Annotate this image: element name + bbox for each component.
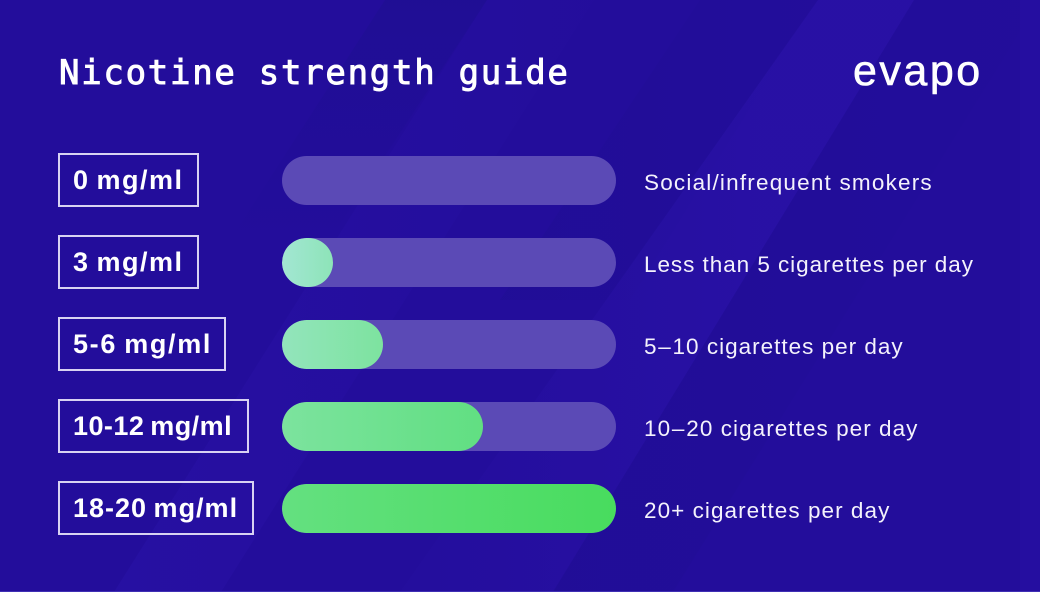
row: 3 mg/ml	[58, 235, 974, 289]
description: Social/infrequent smokers	[644, 170, 933, 195]
label: 5-6 mg/ml: 5-6 mg/ml	[73, 329, 212, 359]
bar: 30 percent fill	[282, 320, 616, 369]
label: 18-20 mg/ml: 18-20 mg/ml	[73, 493, 238, 523]
row: 5-6 mg/ml	[58, 317, 904, 371]
label: 18-20 mg/ml	[58, 481, 254, 535]
row: 10-12 mg/ml	[58, 399, 918, 453]
label: 10-12 mg/ml: 10-12 mg/ml	[73, 411, 232, 441]
label: 5-6 mg/ml	[58, 317, 226, 371]
bar: full	[282, 484, 616, 533]
bar: empty	[282, 156, 616, 205]
description: 20+ cigarettes per day	[644, 498, 890, 523]
label: 0 mg/ml	[58, 153, 199, 207]
logo: evapo: evapo	[853, 47, 983, 95]
label: 3 mg/ml	[58, 235, 199, 289]
description: Less than 5 cigarettes per day	[644, 252, 974, 277]
label: 10-12 mg/ml	[58, 399, 249, 453]
bar: 15 percent fill	[282, 238, 616, 287]
label: 0 mg/ml: 0 mg/ml	[73, 165, 184, 195]
description: 5 – 10 cigarettes per day	[644, 334, 904, 359]
bar: 60 percent fill	[282, 402, 616, 451]
row: 0 mg/ml	[58, 153, 933, 207]
title: Nicotine strength guide	[59, 53, 570, 93]
row: 18-20 mg/ml	[58, 481, 890, 535]
label: 3 mg/ml: 3 mg/ml	[73, 247, 184, 277]
description: 10 – 20 cigarettes per day	[644, 416, 918, 441]
